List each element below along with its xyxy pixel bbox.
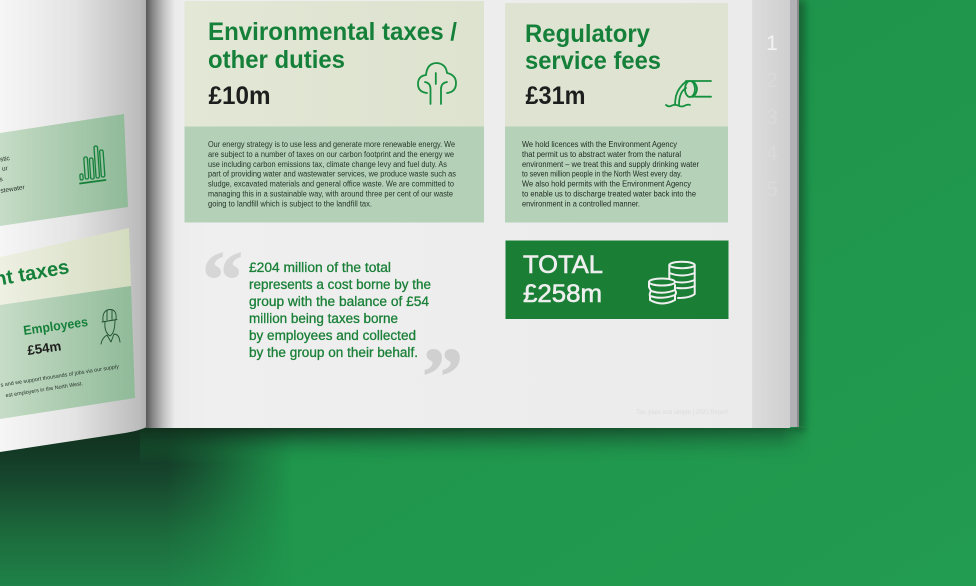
panel: regulatory service fees — [505, 3, 728, 222]
left page fragment text: stewater — [0, 184, 26, 195]
footer text: Tax, plain and simple | 2021 Report — [636, 409, 728, 416]
employees amount: £54m — [26, 338, 62, 358]
icon: tree — [418, 63, 456, 104]
body text: that permit us to abstract water from the natural — [522, 150, 681, 159]
panel: environmental taxes — [184, 1, 484, 222]
heading: Regulatory — [525, 20, 650, 48]
body text: environment in a controlled manner. — [522, 200, 640, 208]
quote text: group with the balance of £54 — [249, 294, 429, 309]
left page fragment text: ur — [2, 165, 9, 173]
quote text: by the group on their behalf. — [249, 345, 418, 360]
section numbers: 4 — [766, 142, 778, 165]
body text: We also hold permits with the Environment Agency — [522, 180, 691, 188]
panel: total — [506, 240, 728, 319]
icon: outflow pipe — [666, 81, 711, 106]
header box — [505, 3, 728, 126]
body box — [505, 126, 728, 222]
panel: right page — [146, 0, 753, 428]
opening quote mark: “ — [202, 234, 243, 325]
icon: bar chart — [80, 146, 106, 184]
section numbers: 5 — [766, 178, 778, 201]
heading: service fees — [525, 47, 661, 75]
amount: £10m — [208, 82, 270, 110]
body text: to seven million people in the North West every day. — [522, 170, 682, 178]
body text: We hold licences with the Environment Agency — [522, 140, 677, 149]
employees body text: est employers in the North West. — [5, 381, 83, 399]
quote text: £204 million of the total — [249, 260, 391, 275]
employees body text — [0, 364, 120, 399]
body text: part of providing water and wastewater services, we produce waste such as — [208, 170, 456, 178]
heading — [525, 20, 661, 75]
body text: sludge, excavated materials and general office waste. We are committed to — [208, 180, 454, 188]
header box — [184, 1, 484, 126]
heading — [208, 18, 457, 74]
left page fragment text — [0, 155, 26, 195]
panel: upper left green box — [0, 114, 128, 226]
panel: employees box — [0, 286, 135, 419]
section numbers: 1 — [766, 32, 778, 55]
closing quote mark: ” — [422, 331, 463, 422]
employees label: Employees — [22, 314, 89, 338]
body text — [522, 140, 699, 208]
section numbers: 2 — [766, 69, 778, 92]
amount: £31m — [526, 82, 586, 110]
body text — [208, 140, 456, 208]
heading: Environmental taxes / — [208, 18, 457, 46]
icon: coins — [649, 262, 695, 304]
quote text — [249, 260, 431, 360]
quote text: by employees and collected — [249, 328, 416, 343]
body text: going to landfill which is subject to the landfill tax. — [208, 200, 372, 208]
employees body text: s and we support thousands of jobs via our supply — [0, 364, 120, 389]
panel: left page — [0, 0, 147, 452]
section numbers — [766, 32, 778, 201]
quote text: represents a cost borne by the — [249, 277, 431, 292]
body text: environment – we treat this and supply drinking water — [522, 160, 699, 169]
section numbers: 3 — [766, 106, 778, 129]
body text: managing this in a sustainable way, with around three per cent of our waste — [208, 190, 454, 198]
body box — [184, 126, 484, 222]
body text: to enable us to discharge treated water back into the — [522, 190, 697, 198]
heading: other duties — [208, 46, 345, 74]
total label: TOTAL — [523, 251, 603, 279]
panel: page edge strip — [752, 0, 799, 428]
body text: use including carbon emissions tax, climate change levy and fuel duty. As — [208, 160, 447, 169]
panel: employment taxes heading box — [0, 228, 131, 305]
quote text: million being taxes borne — [249, 311, 398, 326]
body text: are subject to a number of taxes on our carbon footprint and the energy we — [208, 150, 455, 159]
total amount: £258m — [523, 280, 602, 308]
body text: Our energy strategy is to use less and generate more renewable energy. We — [208, 140, 456, 149]
icon: worker with hard hat — [101, 310, 120, 344]
